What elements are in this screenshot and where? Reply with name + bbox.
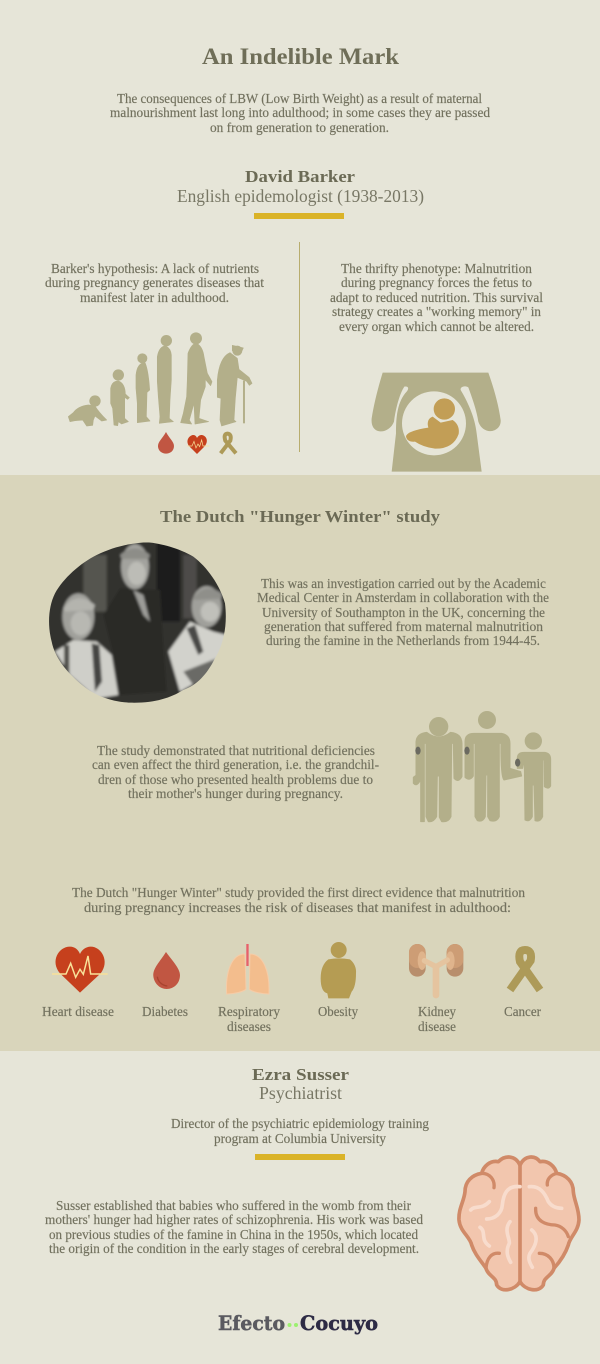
text block: third generation: The study demonstrated that nutritional deficiencies: [97, 744, 375, 759]
text block: Susser role: program at Columbia University: [214, 1132, 386, 1147]
icon: diabetes drop: [153, 952, 180, 989]
label: respiratory diseases: [218, 1005, 280, 1035]
text block: thrifty phenotype: adapt to reduced nutrition. This survival: [330, 291, 543, 306]
text block: third generation: their mother's hunger during pregnancy.: [128, 787, 343, 802]
intro text block: malnourishment last long into adulthood; in some cases they are passed: [110, 106, 490, 121]
text block: Susser role: [171, 1117, 429, 1147]
text block: first direct evidence: during pregnancy increases the risk of diseases that manifest in adulthood:: [84, 901, 511, 916]
logo: Efecto Cocuyo: Efecto: [218, 1312, 285, 1335]
divider: [299, 242, 300, 452]
logo: Efecto Cocuyo: Cocuyo: [300, 1312, 378, 1335]
icon: kidneys: [409, 944, 463, 995]
logo: Efecto Cocuyo: [218, 1312, 378, 1335]
icon: cancer ribbon: [510, 950, 540, 990]
text block: Barker's hypothesis: [45, 262, 264, 306]
icon: human life stages: [68, 332, 252, 426]
photo: three children: [49, 542, 226, 703]
label: cancer: Cancer: [504, 1005, 541, 1020]
panel background: Hunger Winter band: [0, 475, 600, 1051]
text block: Barker's hypothesis: Barker's hypothesis: A lack of nutrients: [51, 262, 259, 277]
text block: third generation: can even affect the third generation, i.e. the grandchil-: [92, 758, 379, 773]
intro text block: The consequences of LBW (Low Birth Weight) as a result of maternal: [117, 92, 482, 107]
text block: Susser findings: mothers' hunger had higher rates of schizophrenia. His work was based: [45, 1213, 423, 1228]
text block: thrifty phenotype: The thrifty phenotype: Malnutrition: [341, 262, 532, 277]
label: kidney disease: [418, 1005, 456, 1035]
text block: Susser findings: on previous studies of the famine in China in the 1950s, which located: [49, 1228, 418, 1243]
heading: Ezra Susser: [252, 1065, 349, 1103]
text block: investigation description: during the famine in the Netherlands from 1944-45.: [266, 634, 540, 649]
text block: thrifty phenotype: strategy creates a "working memory" in: [332, 305, 541, 320]
text block: Susser role: Director of the psychiatric epidemiology training: [171, 1117, 429, 1132]
icon: three generations family: [413, 711, 551, 822]
gold rule: [254, 213, 344, 219]
label: respiratory diseases: Respiratory: [218, 1005, 280, 1020]
icon: brain: [459, 1157, 579, 1290]
icon: lungs: [226, 944, 269, 994]
gold rule: [255, 1154, 345, 1160]
text block: Barker's hypothesis: during pregnancy generates diseases that: [45, 276, 264, 291]
intro text block: [110, 92, 490, 136]
text block: third generation: dren of those who presented health problems due to: [98, 773, 373, 788]
text block: thrifty phenotype: every organ which cannot be altered.: [339, 320, 534, 335]
text block: investigation description: generation that suffered from maternal malnutrition: [264, 620, 543, 635]
label: kidney disease: Kidney: [418, 1005, 456, 1020]
intro text block: on from generation to generation.: [210, 121, 389, 136]
text block: third generation: [92, 744, 379, 802]
label: heart disease: Heart disease: [42, 1005, 114, 1020]
text block: first direct evidence: [72, 886, 525, 916]
text block: Susser findings: Susser established that babies who suffered in the womb from their: [56, 1199, 411, 1214]
label: diabetes: Diabetes: [142, 1005, 188, 1020]
heading: David Barker: English epidemologist (1938-2013): [177, 186, 424, 207]
heading: Ezra Susser: Ezra Susser: [252, 1065, 349, 1084]
text block: investigation description: Medical Center in Amsterdam in collaboration with the: [257, 591, 549, 606]
heading: David Barker: David Barker: [245, 167, 355, 186]
text block: Barker's hypothesis: manifest later in adulthood.: [80, 291, 229, 306]
text block: investigation description: This was an investigation carried out by the Academic: [261, 577, 546, 592]
text block: first direct evidence: The Dutch "Hunger Winter" study provided the first direct evidence that malnutrition: [72, 886, 525, 901]
icon: small blood drop: [158, 432, 174, 454]
icon: pregnant belly with fetus: [372, 373, 501, 472]
heading: Dutch Hunger Winter study: The Dutch "Hunger Winter" study: [160, 507, 441, 526]
text block: thrifty phenotype: [330, 262, 543, 335]
text block: thrifty phenotype: during pregnancy forces the fetus to: [341, 276, 532, 291]
icon: heart disease: [52, 947, 108, 993]
text block: Susser findings: [45, 1199, 423, 1257]
label: respiratory diseases: diseases: [227, 1020, 271, 1035]
icon: small ribbon: [221, 434, 236, 453]
text block: investigation description: University of Southampton in the UK, concerning the: [262, 606, 545, 621]
icon: small heart: [187, 435, 209, 454]
heading: David Barker: [177, 167, 424, 207]
heading: Ezra Susser: Psychiatrist: [259, 1083, 342, 1103]
icon: obesity figure: [321, 942, 356, 998]
title: An Indelible Mark: [202, 44, 399, 69]
label: obesity: Obesity: [318, 1005, 358, 1020]
text block: investigation description: [257, 577, 549, 649]
label: kidney disease: disease: [418, 1020, 456, 1035]
text block: Susser findings: the origin of the condition in the early stages of cerebral development.: [49, 1242, 419, 1257]
